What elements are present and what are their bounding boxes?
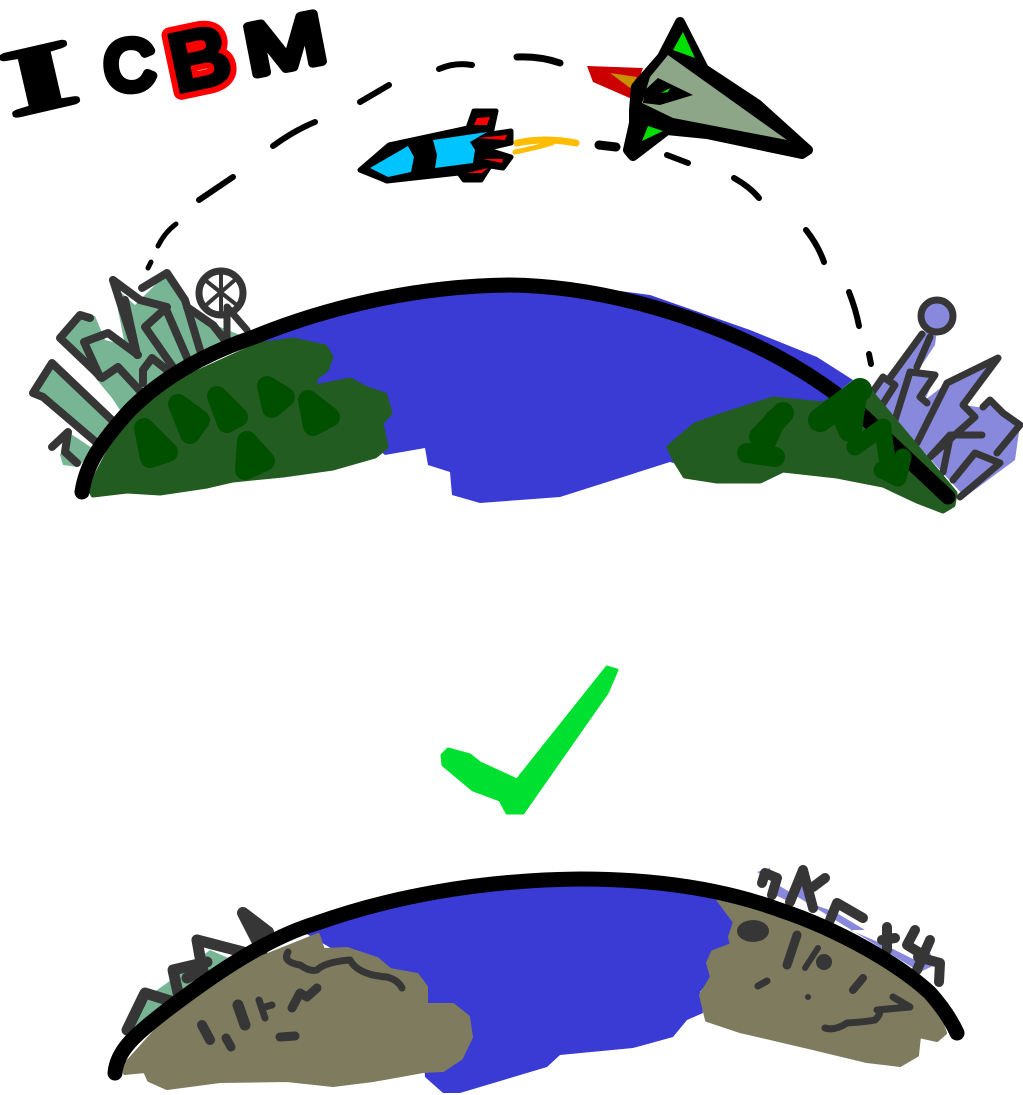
land mass: [125, 935, 471, 1088]
rubble: [127, 913, 268, 1030]
ruined left city: [122, 913, 275, 1033]
title: ICBM: B: [160, 6, 239, 111]
right trees: [747, 390, 903, 478]
engine flame: [587, 66, 643, 99]
skyline lines: [867, 300, 1020, 497]
ruined city fill: [757, 868, 935, 972]
scorched right land: [701, 898, 945, 1065]
rocket exhaust: [515, 140, 576, 152]
earth before: ocean: [250, 285, 853, 503]
checkmark: [442, 667, 617, 813]
title: ICBM: [0, 0, 333, 136]
rubble: [762, 870, 940, 982]
skyline lines: [33, 273, 227, 463]
spacecraft hull: [628, 22, 808, 156]
title: ICBM: B: [160, 6, 239, 111]
cockpit: [643, 78, 693, 105]
rocket body: [370, 132, 487, 177]
land mass: [701, 898, 945, 1065]
trees: [144, 386, 330, 470]
planet surface arc: bottom: [115, 879, 957, 1073]
fins: [642, 32, 695, 141]
ruined right city: [757, 868, 940, 982]
burn marks: [737, 920, 910, 1029]
land mass: [669, 384, 955, 511]
title: ICBM: M: [238, 0, 333, 92]
right city skyline: [867, 300, 1020, 497]
rocket outline: [360, 111, 511, 181]
scorched left land: [125, 935, 471, 1088]
skyline fill: [870, 330, 1020, 497]
planet surface arc: top: [82, 285, 948, 497]
land mass: [90, 340, 390, 495]
interceptor: grey spacecraft: [587, 22, 808, 156]
ICBM rocket: [360, 111, 576, 181]
earth after: ocean: [300, 872, 735, 1093]
ruined city fill: [122, 930, 275, 1033]
title: ICBM: C: [102, 25, 157, 106]
rocket fins: [467, 117, 507, 173]
left city skyline: [33, 271, 247, 467]
skyline fill: [37, 275, 240, 467]
burn marks: [202, 952, 402, 1047]
left forest land: [90, 340, 390, 495]
right forest land: [669, 384, 955, 511]
ferris wheel: [199, 271, 247, 343]
missile trajectory: dashed arc: [148, 57, 871, 364]
